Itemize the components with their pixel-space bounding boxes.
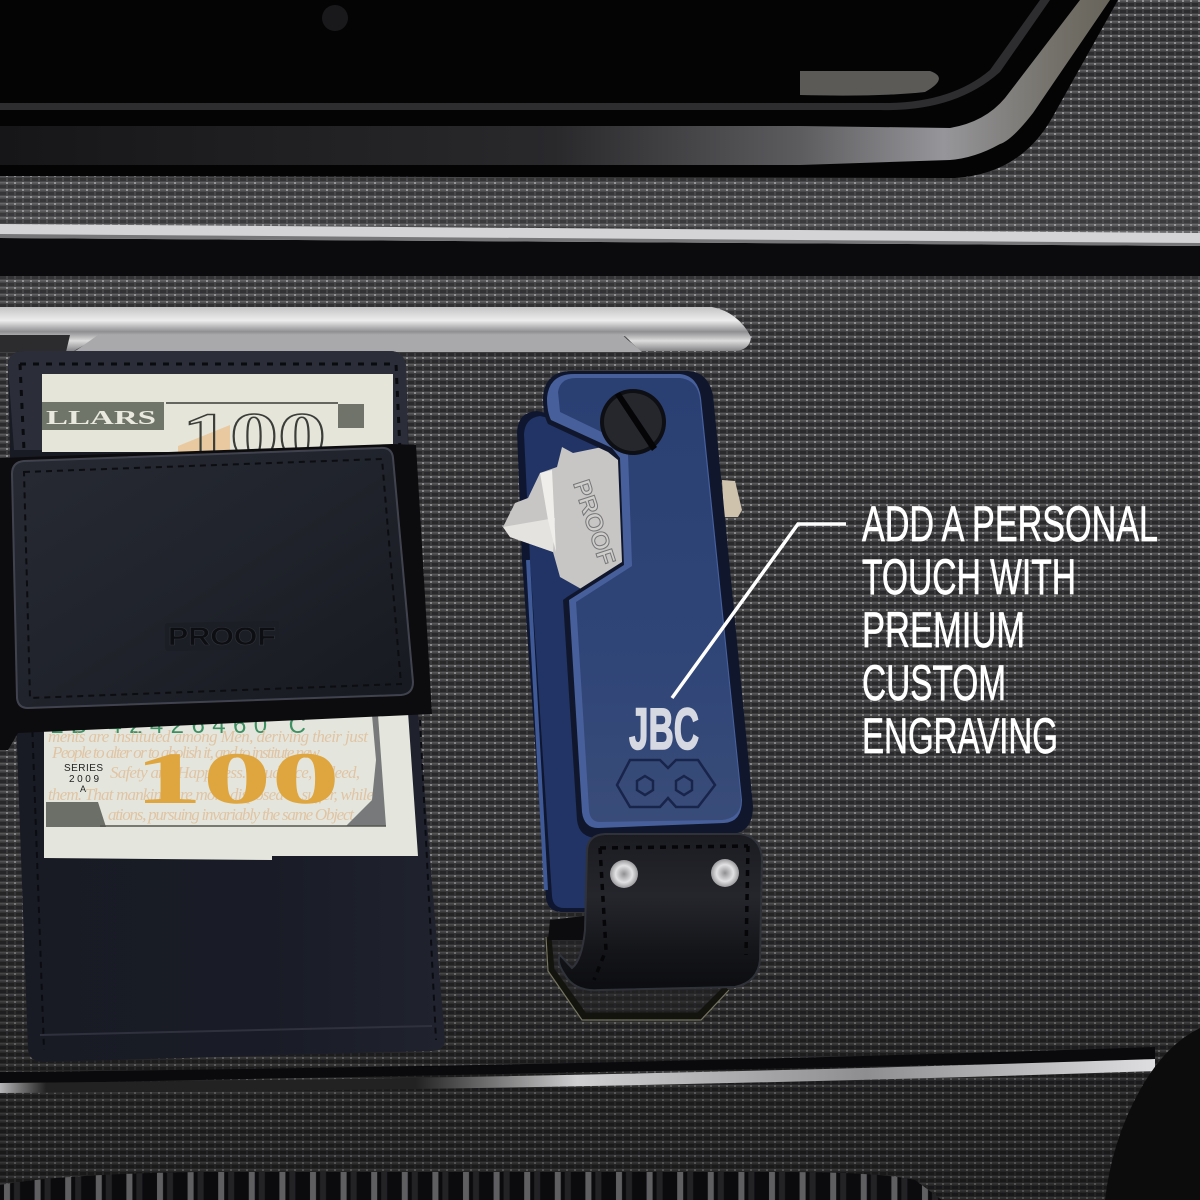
callout text — [862, 496, 1158, 764]
lower trim strip with shadow — [0, 1047, 1155, 1093]
wallet back panel — [8, 351, 445, 1062]
callout text: PREMIUM — [862, 602, 1025, 658]
bill bottom: ations, pursuing invariably the same Object — [108, 805, 355, 824]
upper chrome trim strip — [0, 224, 1200, 276]
bill bottom: SERIES — [64, 763, 103, 774]
key — [503, 445, 630, 590]
screw — [600, 389, 666, 455]
bill bottom: LB 42426460 C — [50, 712, 306, 739]
key: PROOF — [567, 477, 620, 569]
front leather card: PROOF — [168, 623, 276, 651]
bill top — [42, 374, 393, 473]
chrome handle above wallet — [0, 307, 751, 352]
bill top: LLARS — [46, 407, 156, 429]
dark underside and metal loop — [546, 915, 729, 1020]
wallet — [0, 351, 445, 1062]
bill top: 100 — [182, 400, 326, 473]
bill bottom: 2009 — [69, 774, 99, 785]
bill bottom: them. That mankind are more disposed to suffer, while — [48, 785, 374, 804]
callout text: ENGRAVING — [862, 708, 1058, 764]
callout text: CUSTOM — [862, 655, 1006, 711]
bill bottom: ments are instituted among Men, deriving their just — [48, 727, 369, 746]
rivet right — [711, 859, 739, 887]
black fabric corner, bottom right — [1105, 1028, 1200, 1200]
slider tab — [722, 480, 742, 517]
bill bottom: Safety and Happiness. Prudence, indeed, — [110, 763, 360, 782]
callout text: TOUCH WITH — [862, 549, 1076, 605]
elastic band — [0, 444, 432, 750]
glossy black top bezel — [0, 0, 1118, 178]
key organizer — [503, 371, 762, 1020]
organizer back plate — [517, 411, 600, 912]
callout leader line — [672, 524, 846, 698]
engraved monogram JBC: JBC — [629, 697, 699, 762]
rivet left — [610, 860, 638, 888]
engraved logo — [617, 760, 715, 807]
bill bottom: People to alter or to abolish it, and to institute new — [51, 743, 321, 762]
leather strap — [559, 834, 762, 990]
front leather card — [12, 448, 413, 708]
ribbed vent at the bottom — [0, 1172, 942, 1200]
bill bottom: A — [80, 784, 86, 794]
organizer front plate — [543, 371, 753, 838]
bill bottom — [44, 712, 418, 860]
bill bottom: 100 — [134, 738, 340, 820]
